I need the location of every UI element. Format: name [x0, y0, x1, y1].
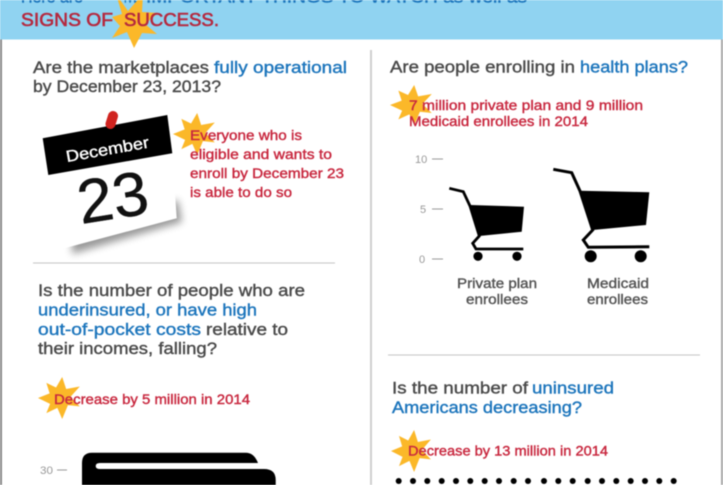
text: enrollment target: Medicaid enrollees in 2014 — [409, 113, 588, 129]
chart axis label — [40, 465, 67, 477]
heading: underinsured question — [38, 281, 305, 358]
text: enrollment target — [409, 97, 643, 129]
text: enrollment target: 7 million private plan and 9 million — [409, 97, 643, 113]
icon: private plan cart — [449, 188, 524, 261]
heading: underinsured question: their incomes, falling? — [38, 339, 217, 358]
heading: underinsured question: relative to — [206, 320, 288, 339]
text: enrollment target: is able to do so — [190, 184, 292, 200]
heading: enrollment question: health plans? — [580, 58, 688, 76]
chart axis — [415, 154, 443, 266]
heading: enrollment question — [390, 58, 688, 76]
icon: calendar: 23 — [72, 159, 153, 238]
icon: enrollment star — [390, 85, 432, 125]
icon: wallet — [82, 453, 276, 485]
chart axis label: 30 — [40, 465, 53, 477]
label: medicaid enrollees: enrollees — [587, 291, 648, 307]
panel: underinsured — [38, 281, 305, 485]
header signs of success: SIGNS OF — [21, 10, 113, 30]
icon: header star — [112, 0, 158, 48]
header intro text — [21, 0, 527, 6]
chart axis: 5 — [420, 204, 426, 216]
heading: marketplaces question — [33, 58, 347, 96]
heading: marketplaces question: fully operational — [214, 58, 347, 77]
panel: enrollment — [390, 58, 688, 307]
text: underinsured target: Decrease by 5 million in 2014 — [54, 391, 250, 407]
text: enrollment target: enroll by December 23 — [190, 165, 344, 181]
heading: marketplaces question: by December 23, 2013? — [33, 77, 221, 96]
panel: uninsured — [391, 378, 677, 484]
icon: underinsured star — [38, 377, 80, 419]
heading: underinsured question: underinsured, or have high — [38, 300, 257, 320]
heading: uninsured question: Americans decreasing? — [392, 398, 582, 417]
heading: underinsured question: out-of-pocket costs — [38, 320, 201, 339]
icon: medicaid cart — [553, 169, 649, 262]
text: enrollment target — [190, 127, 344, 200]
header signs of success: SUCCESS. — [124, 10, 219, 30]
heading: uninsured question: uninsured — [532, 378, 614, 398]
icon: uninsured star — [391, 430, 431, 472]
chart axis: 10 — [415, 154, 427, 166]
chart: enrollees by plan — [415, 154, 649, 307]
header signs of success — [21, 10, 219, 30]
heading: enrollment question: Are people enrolling in — [390, 58, 575, 76]
text: uninsured target: Decrease by 13 million in 2014 — [408, 442, 608, 458]
icon: calendar: December — [65, 134, 151, 166]
label: medicaid enrollees — [587, 275, 649, 307]
label: private plan enrollees: enrollees — [466, 291, 528, 307]
text: enrollment target: Everyone who is — [190, 127, 302, 143]
icon: calendar star — [173, 113, 215, 155]
pictogram: people dots — [396, 478, 677, 484]
heading: marketplaces question: Are the marketplaces — [33, 58, 209, 77]
panel: marketplaces — [33, 58, 347, 254]
heading: uninsured question: Is the number of — [392, 378, 528, 398]
text: enrollment target: eligible and wants to — [190, 146, 332, 162]
label: private plan enrollees — [457, 275, 537, 307]
heading: uninsured question — [392, 378, 614, 417]
heading: underinsured question: Is the number of people who are — [38, 281, 305, 300]
icon: calendar — [43, 115, 182, 254]
header banner — [0, 0, 723, 48]
label: private plan enrollees: Private plan — [457, 275, 537, 291]
chart axis: 0 — [419, 254, 425, 266]
label: medicaid enrollees: Medicaid — [587, 275, 649, 291]
